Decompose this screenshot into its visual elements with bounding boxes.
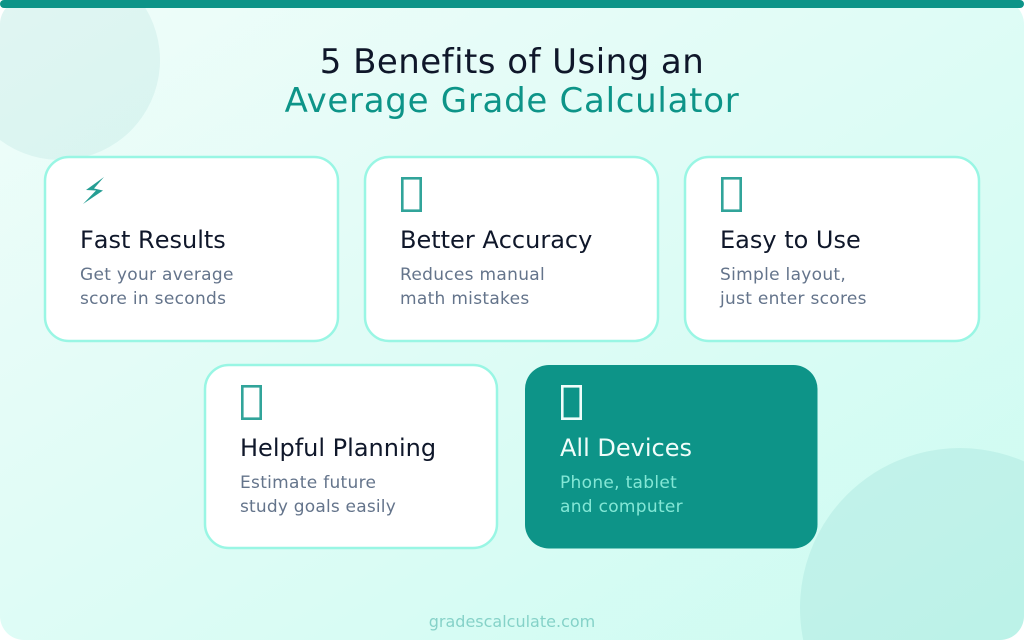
card title: Helpful Planning (240, 434, 436, 462)
card: All Devices (525, 365, 818, 548)
card description (560, 473, 683, 517)
card description: Get your average (80, 265, 234, 285)
card description (400, 265, 545, 309)
icon: lightning bolt (83, 177, 104, 204)
card description: Phone, tablet (560, 473, 677, 493)
footer website: gradescalculate.com (429, 612, 595, 631)
card title: Fast Results (80, 226, 226, 254)
card: Fast Results (45, 157, 338, 341)
card title: All Devices (560, 434, 692, 462)
card description: Estimate future (240, 473, 376, 493)
icon: missing glyph box (242, 386, 261, 419)
card: Easy to Use (685, 157, 979, 341)
card description: math mistakes (400, 289, 530, 309)
card description (719, 265, 867, 309)
card description: and computer (560, 497, 683, 517)
decorative circle bottom right (800, 448, 1024, 640)
icon: missing glyph box (562, 386, 581, 419)
card description (80, 265, 234, 309)
title: Average Grade Calculator (285, 81, 739, 121)
card: Helpful Planning (205, 365, 497, 548)
card description: score in seconds (80, 289, 226, 309)
icon: missing glyph box (722, 178, 741, 211)
card description: Simple layout, (720, 265, 846, 285)
top accent bar (0, 0, 1024, 8)
card title: Better Accuracy (400, 226, 592, 254)
decorative circle top left (0, 0, 160, 160)
card description: study goals easily (240, 497, 396, 517)
card: Better Accuracy (365, 157, 658, 341)
title: 5 Benefits of Using an (320, 42, 704, 82)
card title: Easy to Use (720, 226, 861, 254)
title (285, 42, 739, 121)
card description: just enter scores (719, 289, 867, 309)
icon: missing glyph box (402, 178, 421, 211)
card description (240, 473, 396, 517)
card description: Reduces manual (400, 265, 545, 285)
